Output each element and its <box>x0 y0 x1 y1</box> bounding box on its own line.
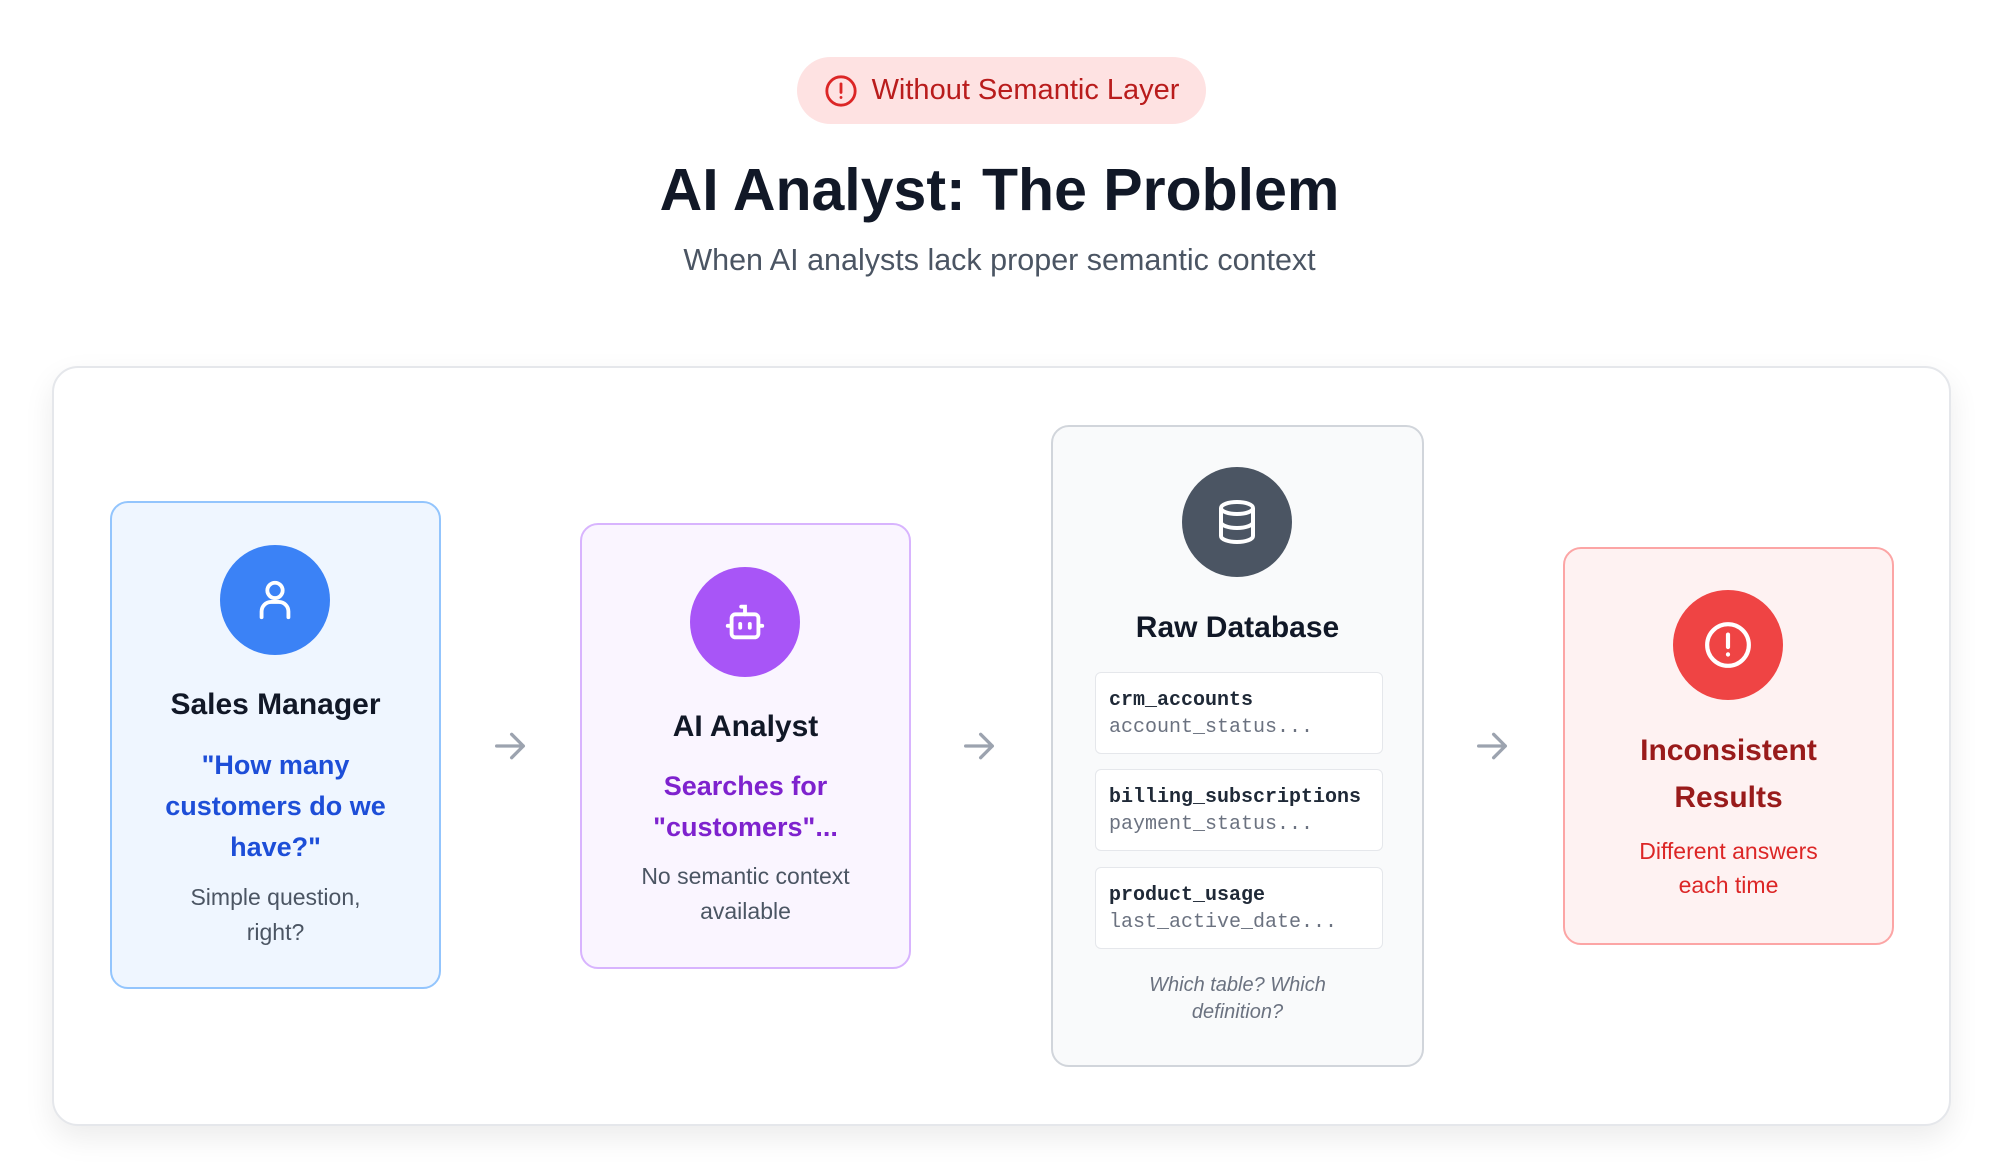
table: crm_accounts: crm_accounts <box>1109 689 1253 712</box>
table: crm_accounts <box>1095 672 1383 754</box>
arrow 2 <box>964 732 994 760</box>
heading: Raw Database <box>1136 611 1339 644</box>
icon: user <box>220 545 330 655</box>
table: crm_accounts: account_status... <box>1109 716 1313 739</box>
card: ai analyst <box>580 523 911 969</box>
arrow 1 <box>495 732 525 760</box>
heading: AI Analyst <box>673 710 818 743</box>
card: raw database <box>1051 425 1424 1067</box>
purple text: Searches for "customers"... <box>653 771 838 842</box>
table: product_usage <box>1095 867 1383 949</box>
heading: Results <box>1674 781 1783 814</box>
table: billing_subscriptions: payment_status... <box>1109 813 1313 836</box>
icon: alert circle <box>825 75 857 107</box>
badge <box>797 57 1206 124</box>
main panel <box>52 366 1951 1126</box>
arrow 3 <box>1477 732 1507 760</box>
table: product_usage: product_usage <box>1109 884 1265 907</box>
title: AI Analyst: The Problem <box>660 157 1339 223</box>
note: No semantic context available <box>641 863 850 924</box>
badge: Without Semantic Layer <box>872 74 1179 106</box>
note: Different answers each time <box>1639 838 1818 898</box>
question note: Which table? Which definition? <box>1149 974 1326 1023</box>
subtitle: When AI analysts lack proper semantic context <box>683 243 1316 277</box>
heading <box>1640 734 1817 814</box>
note: Simple question, right? <box>190 884 361 945</box>
card: sales manager <box>110 501 441 989</box>
icon: alert <box>1673 590 1783 700</box>
icon: bot <box>690 567 800 677</box>
heading: Sales Manager <box>170 688 381 721</box>
table: product_usage: last_active_date... <box>1109 911 1337 934</box>
heading: Inconsistent <box>1640 734 1817 767</box>
table: billing_subscriptions: billing_subscriptions <box>1109 786 1361 809</box>
card: inconsistent results <box>1563 547 1894 945</box>
icon: database <box>1182 467 1292 577</box>
table: billing_subscriptions <box>1095 769 1383 851</box>
quote: "How many customers do we have?" <box>165 750 386 862</box>
